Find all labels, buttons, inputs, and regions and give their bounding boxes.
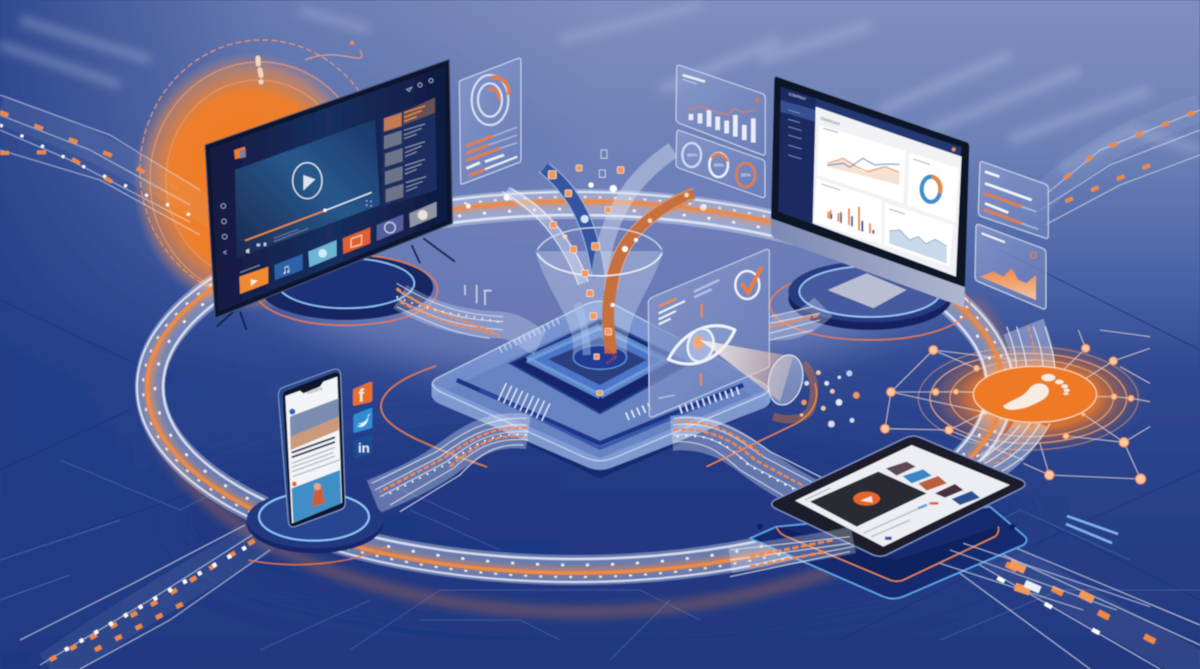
glass stream through footprint [977, 327, 1055, 473]
floating panel: bar chart and gauges [676, 65, 765, 198]
icon: twitter [353, 408, 372, 433]
data rings: large ellipse stream [137, 192, 1013, 582]
center chip platform [430, 301, 772, 478]
data stream: bottom right [935, 530, 1200, 669]
gauges panel: 85% [741, 173, 752, 179]
data stream: top right [1030, 108, 1200, 225]
TV screen device: ♫ [280, 261, 292, 277]
data stream: bottom left [0, 520, 270, 669]
footprint inner disc [973, 366, 1097, 422]
tablet device [772, 436, 1025, 556]
desktop monitor: Dashboard [820, 116, 840, 126]
tablet platform [750, 507, 1027, 599]
funnel with converging data streams [466, 150, 707, 395]
gauges panel: 60% [687, 153, 698, 159]
circuit outline left of chip [381, 366, 487, 467]
footprint target rings and network [881, 330, 1150, 484]
connector stream: chip to tablet [672, 417, 847, 513]
chart panel [676, 65, 765, 155]
connector stream: chip to monitor [770, 307, 823, 340]
gauges panel: 80% [714, 163, 725, 169]
desktop monitor: COMPANY [788, 92, 807, 101]
reflection of ring [150, 168, 1010, 612]
area chart panel [975, 224, 1046, 309]
floating panels: right side [975, 162, 1048, 309]
icon: linkedin: in [358, 441, 370, 456]
light cone to lens [700, 340, 817, 467]
TV screen device [205, 59, 455, 330]
desktop monitor [771, 77, 969, 308]
gauges panel [676, 130, 765, 198]
footprint icon [1003, 374, 1070, 410]
floating panel: ring gauge [459, 58, 521, 184]
side circuit highlights [1066, 516, 1118, 543]
orange concentric glow behind TV [132, 40, 384, 312]
connector stream: chip to TV [397, 283, 540, 343]
scattered data particles [800, 370, 860, 427]
smartphone: Trending [305, 385, 323, 396]
TV pedestal base [254, 255, 492, 325]
monitor pedestal base [770, 261, 970, 340]
list panel [978, 162, 1048, 238]
tablet foreground stream [730, 537, 1150, 610]
smartphone [278, 369, 345, 527]
data stream: top left [0, 95, 215, 235]
phone base [247, 490, 387, 565]
social icons [353, 382, 372, 458]
analytics panel with eye [648, 249, 769, 417]
connector stream: chip to phone [372, 418, 528, 512]
icon: facebook: f [358, 385, 364, 405]
